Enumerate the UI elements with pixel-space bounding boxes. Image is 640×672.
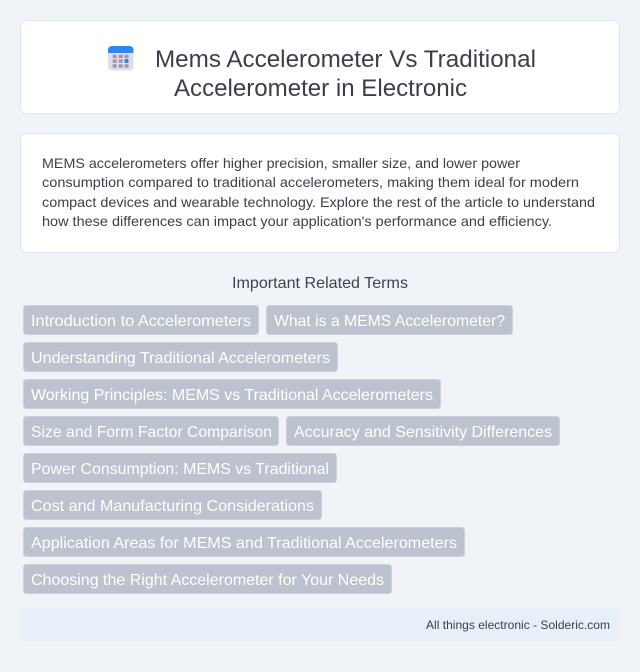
text block: intro: how these differences can impact your application's performance and efficiency.	[42, 213, 552, 229]
tag: cost	[24, 490, 322, 520]
tag: introduction	[24, 306, 258, 334]
text block: intro: consumption compared to traditional accelerometers, making them ideal for modern	[42, 174, 579, 190]
tag: power	[24, 454, 336, 482]
tag: accuracy: Accuracy and Sensitivity Differences	[294, 424, 552, 441]
tag: choosing	[24, 564, 392, 594]
tag: cost: Cost and Manufacturing Considerations	[31, 498, 314, 515]
footer: All things electronic - Solderic.com	[426, 618, 610, 632]
tag: what is MEMS: What is a MEMS Accelerometer?	[274, 313, 505, 330]
tag: size: Size and Form Factor Comparison	[31, 424, 272, 441]
panel: title header	[20, 20, 620, 114]
tag: application: Application Areas for MEMS and Traditional Accelerometers	[31, 535, 457, 552]
icon: calendar	[108, 46, 134, 70]
footer	[20, 608, 620, 642]
text block: intro: compact devices and wearable technology. Explore the rest of the article to understand	[42, 194, 595, 210]
tag: application	[24, 528, 464, 556]
title: Accelerometer in Electronic	[174, 75, 467, 102]
text block: intro: MEMS accelerometers offer higher precision, smaller size, and lower power	[42, 155, 520, 171]
tag: traditional	[24, 342, 338, 372]
heading: related terms: Important Related Terms	[232, 275, 408, 292]
text block: intro	[42, 155, 595, 229]
panel: intro paragraph	[20, 134, 620, 252]
tag: traditional: Understanding Traditional Accelerometers	[31, 350, 330, 367]
title	[155, 46, 536, 102]
tag: accuracy	[286, 416, 560, 446]
tag: introduction: Introduction to Accelerometers	[31, 313, 251, 330]
tag: working principles	[24, 380, 440, 408]
tag: what is MEMS	[266, 306, 512, 334]
tag: working principles: Working Principles: MEMS vs Traditional Accelerometers	[31, 387, 433, 404]
panel: related term tags	[24, 306, 560, 594]
tag: power: Power Consumption: MEMS vs Traditional	[31, 461, 329, 478]
title: Mems Accelerometer Vs Traditional	[155, 46, 536, 73]
tag: size	[24, 416, 278, 446]
tag: choosing: Choosing the Right Accelerometer for Your Needs	[31, 572, 384, 589]
